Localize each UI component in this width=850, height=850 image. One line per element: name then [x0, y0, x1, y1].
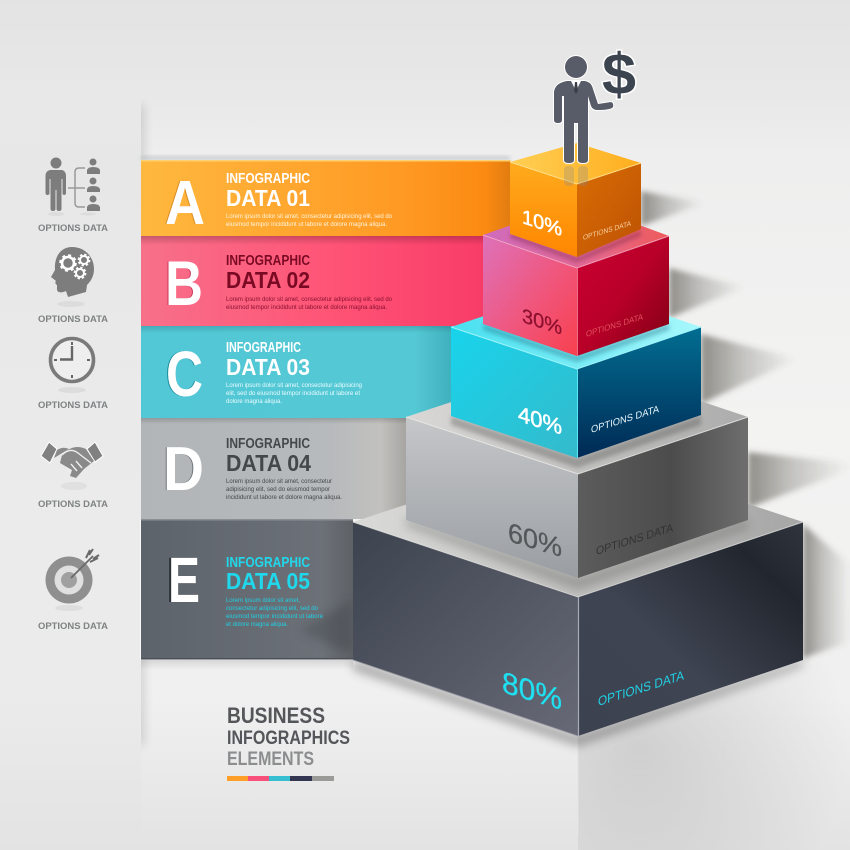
ribbon E body text: [226, 597, 323, 628]
panel: ribbon A: [141, 156, 511, 238]
ribbon E title: DATA 05: [226, 568, 310, 594]
title block: [227, 703, 350, 781]
ribbon C body text: elit, sed do eiusmod tempor incididunt ut labore et: [226, 390, 360, 397]
letter E: E: [168, 544, 200, 616]
option label 3: OPTIONS DATA: [38, 400, 108, 411]
ribbon E body text: Lorem ipsum dolor sit amet,: [226, 597, 300, 604]
40% label: 40%: [518, 401, 562, 440]
option label 2: OPTIONS DATA: [38, 314, 108, 325]
left icon column panel: [0, 104, 148, 746]
ribbon B title: DATA 02: [226, 267, 310, 293]
panel: ribbon C: [141, 326, 452, 418]
panel: ribbon B: [141, 236, 484, 326]
icon: businessman: [554, 56, 613, 163]
ribbon C heading: INFOGRAPHIC: [226, 340, 301, 356]
shadow on block C top: [483, 324, 669, 362]
panel: ribbon E: [141, 519, 353, 670]
block A 10%: [510, 143, 641, 257]
title block: INFOGRAPHICS: [227, 728, 350, 749]
ribbon B body text: eiusmod tempor incididunt ut labore et dolore magna aliqua.: [226, 304, 387, 311]
ribbon E body text: eiusmod tempor incididunt ut labore: [226, 613, 323, 620]
30% label: 30%: [522, 304, 562, 340]
block D 60%: [406, 360, 748, 578]
option label 5: OPTIONS DATA: [38, 621, 108, 632]
title colour bar: [227, 776, 334, 781]
ribbon C body text: Lorem ipsum dolor sit amet, consectetur adipisicing: [226, 382, 362, 389]
option label 1: OPTIONS DATA: [38, 223, 108, 234]
shadow on block E top: [406, 518, 748, 590]
ribbon C title: DATA 03: [226, 354, 310, 380]
ribbon C body text: dolore magna aliqua.: [226, 398, 282, 405]
block B 30%: [483, 202, 669, 356]
options data label E: OPTIONS DATA: [598, 668, 684, 709]
ribbon E heading: INFOGRAPHIC: [226, 555, 310, 571]
option label 4: OPTIONS DATA: [38, 499, 108, 510]
options data label B: OPTIONS DATA: [586, 311, 643, 339]
ribbon D title: DATA 04: [226, 450, 311, 476]
icon: org chart person: [46, 158, 100, 216]
letter C: C: [166, 338, 203, 410]
icon: clock: [50, 338, 94, 393]
ribbon A heading: INFOGRAPHIC: [226, 171, 310, 187]
title block: BUSINESS: [227, 703, 325, 728]
options data label D: OPTIONS DATA: [596, 521, 673, 558]
ribbon E body text: consectetur adipisicing elit, sed do: [226, 605, 318, 612]
ribbon D body text: incididunt ut labore et dolore magna aliqua.: [226, 494, 342, 501]
ribbon A body text: Lorem ipsum dolor sit amet, consectetur adipisicing elit, sed do: [226, 213, 392, 220]
letter B: B: [165, 249, 203, 319]
pyramid cast shadows: [353, 191, 850, 746]
panel: ribbon D: [141, 418, 407, 519]
60% label: 60%: [508, 517, 562, 563]
options data label A: OPTIONS DATA: [583, 219, 631, 242]
ribbon B body text: Lorem ipsum dolor sit amet, consectetur adipisicing elit, sed do: [226, 296, 392, 303]
ribbon D body text: Lorem ipsum dolor sit amet, consectetur: [226, 478, 333, 485]
ribbon B body text: [226, 296, 392, 311]
block C 40%: [451, 285, 701, 458]
letter A: A: [165, 169, 205, 238]
80% label: 80%: [502, 666, 562, 717]
options data label C: OPTIONS DATA: [591, 404, 659, 436]
ribbon D body text: [226, 478, 342, 501]
letter D: D: [163, 435, 204, 504]
ribbon D heading: INFOGRAPHIC: [226, 436, 310, 452]
ribbon B heading: INFOGRAPHIC: [226, 253, 310, 269]
ribbon A body text: [226, 213, 392, 228]
ribbon A body text: eiusmod tempor incididunt ut labore et dolore magna aliqua.: [226, 221, 387, 228]
shadow on block B top: [510, 230, 641, 263]
title block: ELEMENTS: [227, 749, 314, 770]
ribbon E body text: et dolore magna aliqua.: [226, 621, 288, 628]
icon: head with gears: [51, 247, 94, 307]
icon: target with arrow: [46, 549, 99, 611]
ribbon D body text: adipisicing elit, sed do eiusmod tempor: [226, 486, 331, 493]
figure reflection: [564, 166, 588, 186]
shadow on block D top: [451, 416, 701, 468]
icon: handshake: [41, 442, 103, 490]
ribbon A title: DATA 01: [226, 185, 310, 211]
block E 80%: [353, 448, 803, 736]
10% label: 10%: [522, 205, 562, 241]
ribbon C body text: [226, 382, 362, 405]
icon: dollar sign: $: [602, 42, 636, 107]
